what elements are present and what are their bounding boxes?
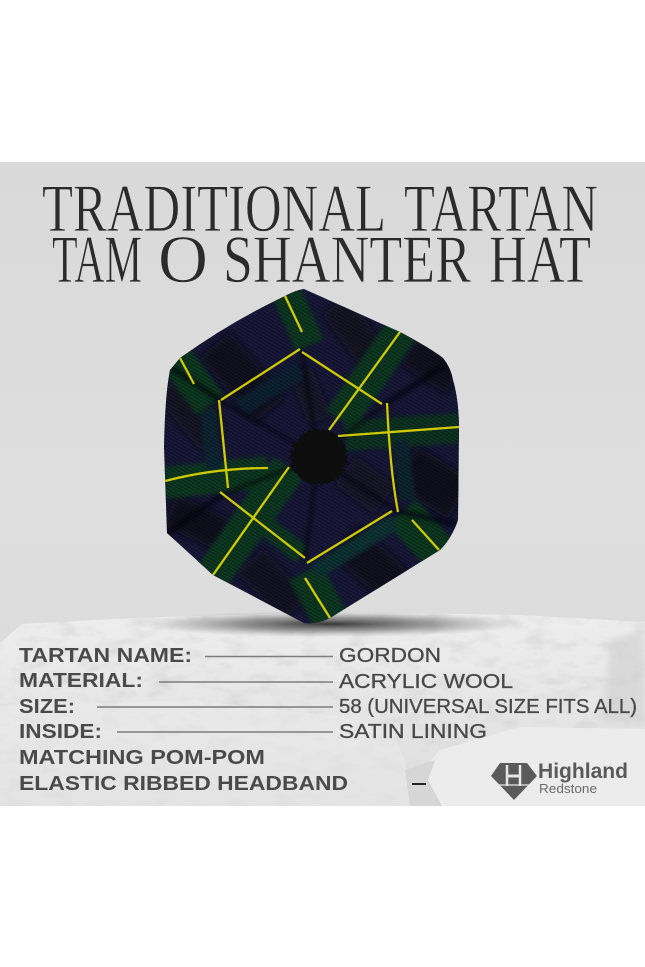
background panel bbox=[0, 162, 645, 806]
spec labels: SIZE: bbox=[19, 695, 75, 718]
spec values: SATIN LINING bbox=[339, 720, 487, 743]
spec labels: TARTAN NAME: bbox=[19, 644, 192, 667]
spec labels: MATCHING POM-POM bbox=[19, 746, 265, 769]
hat seams bbox=[165, 350, 458, 560]
pom-pom bbox=[291, 429, 347, 485]
rock pedestal bbox=[0, 612, 645, 806]
logo: Highland Redstone: Highland bbox=[538, 760, 628, 783]
dark tartan checks bbox=[170, 305, 460, 610]
title: HAT bbox=[489, 221, 591, 297]
title: TRADITIONAL bbox=[42, 170, 386, 246]
tartan hat bbox=[160, 285, 465, 630]
spec values: ACRYLIC WOOL bbox=[339, 670, 513, 693]
logo: Highland Redstone bbox=[491, 760, 628, 800]
spec labels: MATERIAL: bbox=[19, 669, 143, 692]
spec values bbox=[339, 644, 637, 743]
title: TAM bbox=[52, 221, 142, 297]
logo: Highland Redstone: Redstone bbox=[539, 781, 597, 796]
spec values: 58 (UNIVERSAL SIZE FITS ALL) bbox=[339, 695, 637, 718]
spec values: GORDON bbox=[339, 644, 441, 667]
spec labels: INSIDE: bbox=[19, 720, 102, 743]
yellow tartan lines bbox=[165, 296, 459, 618]
title bbox=[42, 170, 598, 297]
title: O bbox=[158, 221, 208, 297]
twill texture bbox=[160, 285, 465, 630]
spec labels: ELASTIC RIBBED HEADBAND bbox=[19, 772, 348, 795]
title: SHANTER bbox=[223, 221, 472, 297]
spec labels bbox=[19, 644, 348, 795]
green tartan bands bbox=[165, 290, 460, 622]
hat shadow bbox=[135, 611, 525, 637]
leader lines bbox=[97, 656, 333, 732]
